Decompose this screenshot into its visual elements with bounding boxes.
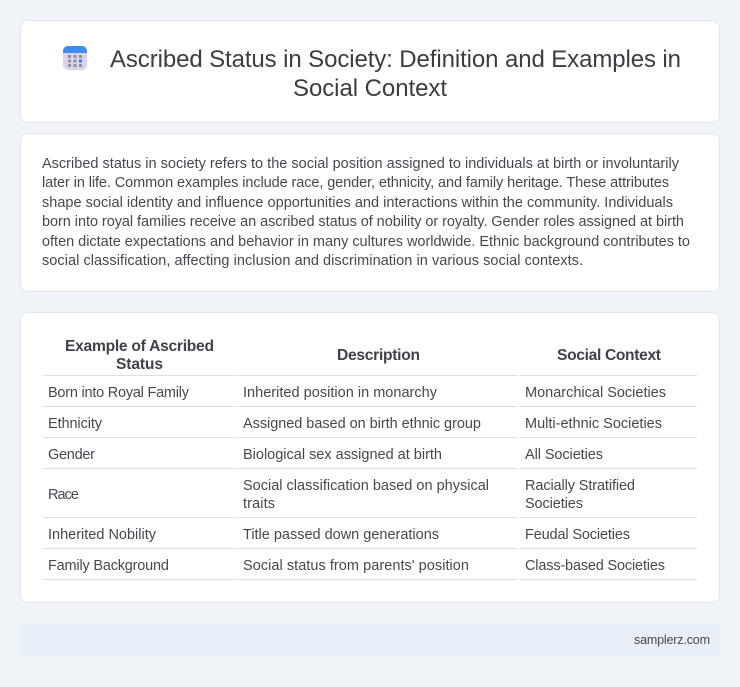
table row: ethnicity [48, 416, 662, 432]
panel: title header [20, 20, 720, 122]
text block: definition paragraph [42, 156, 690, 269]
footer: samplerz.com [634, 633, 710, 647]
text block: definition paragraph: later in life. Common examples include race, gender, ethnicity, and family heritage. These attributes [42, 175, 669, 191]
table row: family background: Social status from parents' position [243, 558, 469, 574]
table row: ethnicity: Ethnicity [48, 416, 103, 432]
table row: family background [48, 558, 665, 574]
table header row: Social Context [557, 347, 661, 364]
table row: royal family: Monarchical Societies [525, 385, 666, 401]
table row: royal family: Born into Royal Family [48, 385, 190, 401]
table row: race: Societies [525, 496, 583, 512]
table row: ethnicity: Assigned based on birth ethnic group [243, 416, 481, 432]
table row: gender [48, 447, 603, 463]
panel: definition text [20, 134, 720, 292]
table row: royal family: Inherited position in monarchy [243, 385, 438, 401]
table header row [65, 338, 661, 373]
title: Social Context [293, 75, 447, 102]
panel: examples table [20, 312, 720, 602]
text block: definition paragraph: often dictate expectations and behavior in many cultures worldwide. Ethnic background contributes to [42, 234, 690, 250]
text block: definition paragraph: Ascribed status in society refers to the social position assigned to individuals at birth or involuntarily [42, 156, 680, 172]
table header row: Status [116, 356, 163, 373]
table row: nobility [48, 527, 630, 543]
table header row: Example of Ascribed [65, 338, 214, 355]
text block: definition paragraph: social classification, affecting inclusion and discrimination in various social contexts. [42, 253, 583, 269]
table row: nobility: Inherited Nobility [48, 527, 157, 543]
table row: ethnicity: Multi-ethnic Societies [525, 416, 662, 432]
table row: gender: All Societies [525, 447, 603, 463]
table row: gender: Biological sex assigned at birth [243, 447, 442, 463]
title [110, 46, 681, 102]
table row: race: Social classification based on physical [243, 478, 489, 494]
table row: race [48, 478, 635, 512]
table header row: Description [337, 347, 420, 364]
table row: race: Race [48, 487, 79, 503]
title: Ascribed Status in Society: Definition and Examples in [110, 46, 681, 73]
table row: gender: Gender [48, 447, 95, 463]
table row: nobility: Title passed down generations [243, 527, 439, 543]
table row: race: Racially Stratified [525, 478, 635, 494]
text block: definition paragraph: born into royal families receive an ascribed status of nobility or royalty. Gender roles assigned at birth [42, 214, 684, 230]
table row: nobility: Feudal Societies [525, 527, 630, 543]
footer [20, 624, 720, 657]
table row: race: traits [243, 496, 275, 512]
table row: royal family [48, 385, 666, 401]
text block: definition paragraph: shape social identity and influence opportunities and interactions within the community. Individuals [42, 195, 673, 211]
table row: family background: Family Background [48, 558, 169, 574]
icon: calendar [63, 46, 87, 70]
table row: family background: Class-based Societies [525, 558, 665, 574]
